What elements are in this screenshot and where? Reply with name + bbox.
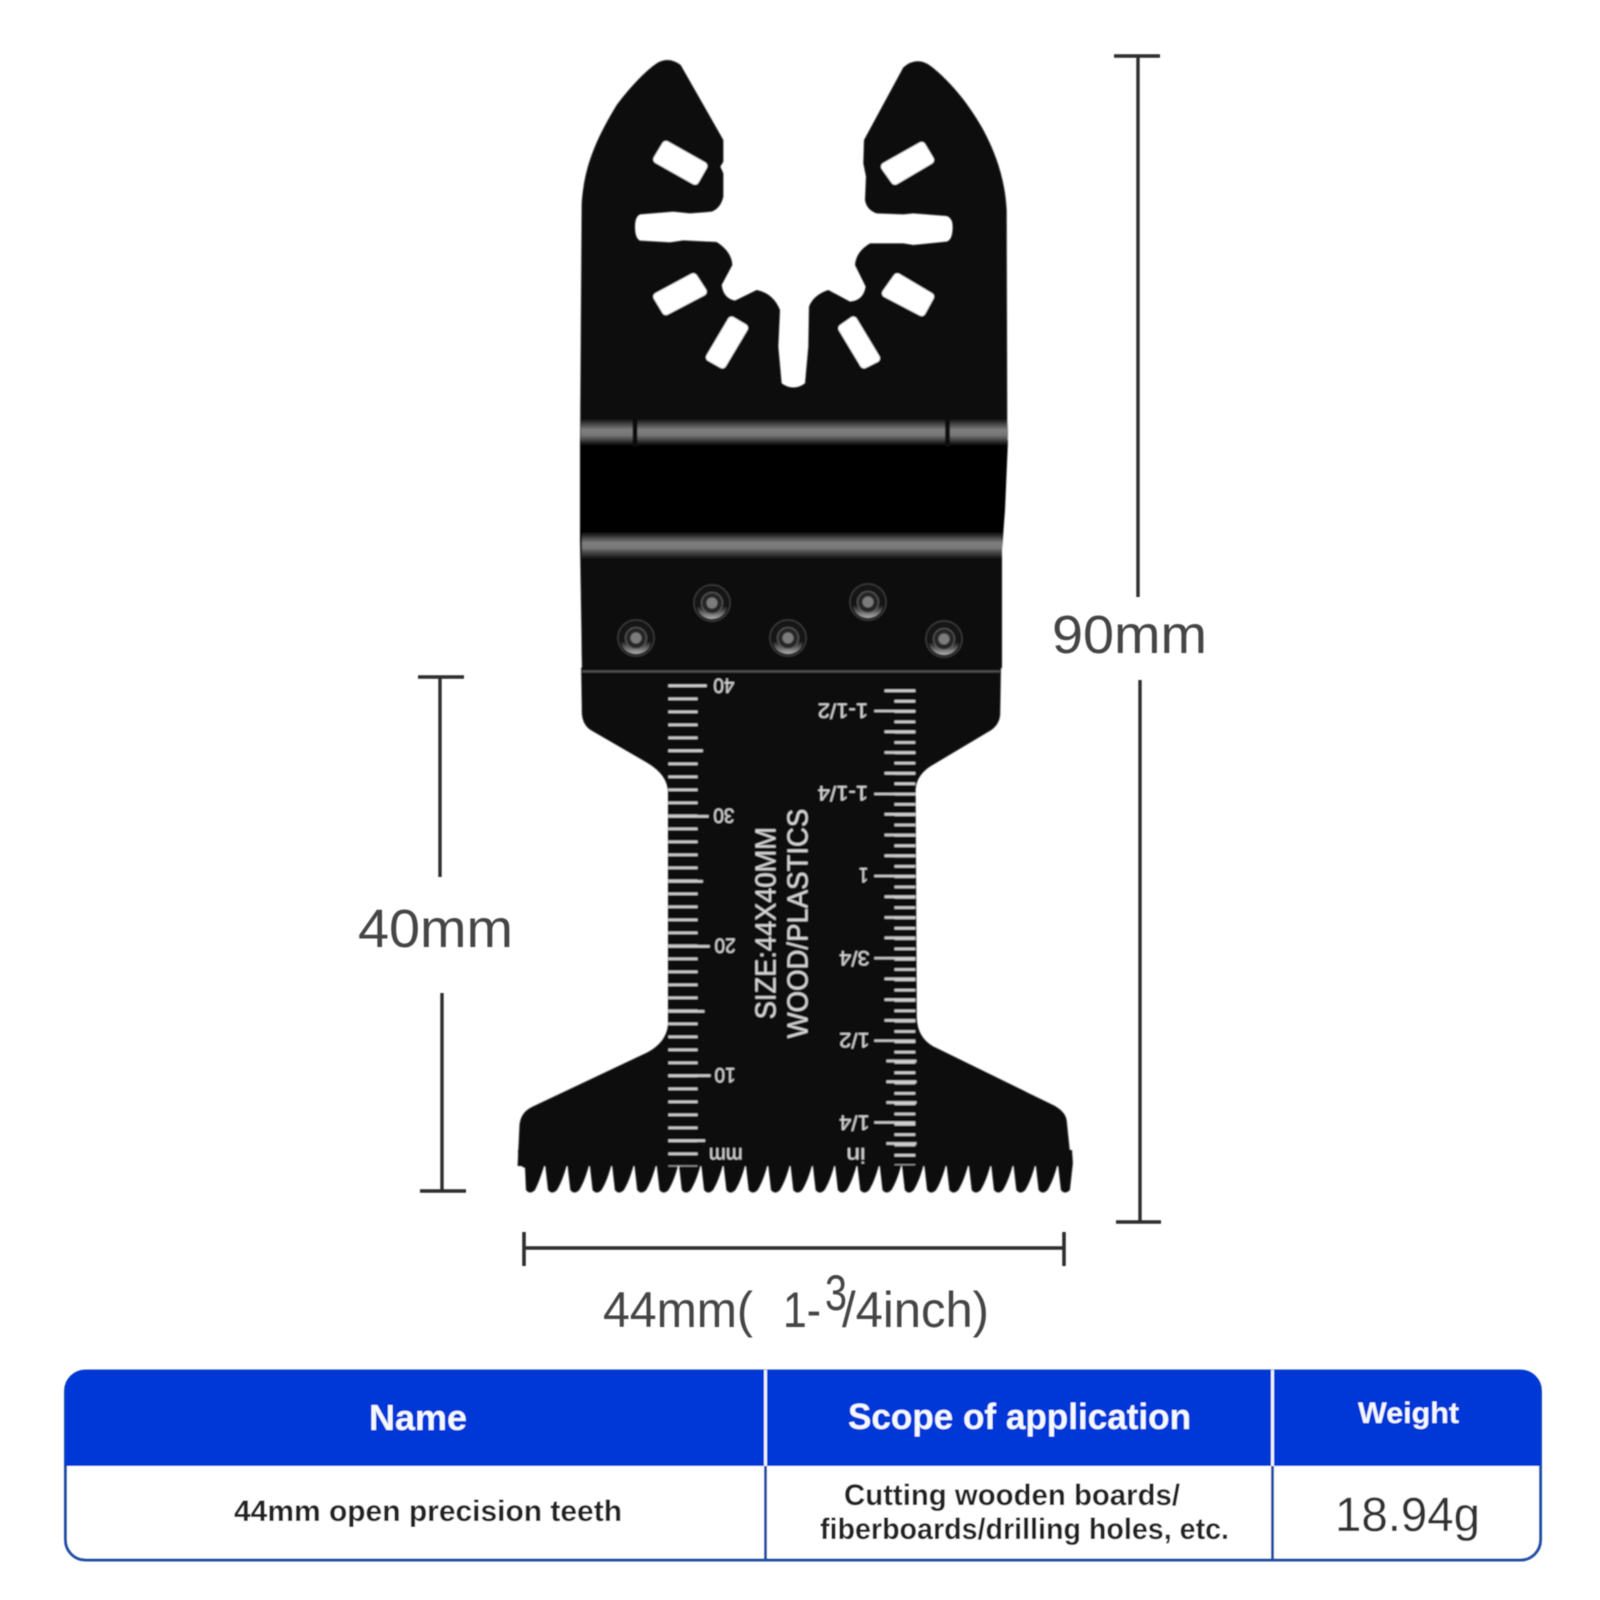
blade mounting head with star cut-out [580,60,1007,453]
label 40: 40 [713,674,734,698]
table body [66,1371,1540,1560]
slot upper right [885,146,930,181]
label 1: 1 [859,863,868,887]
mid section body [580,440,1008,668]
shank outline [518,668,1071,1166]
size engraving: SIZE:44X40MM [750,827,782,1019]
width label: 44mm( [603,1282,753,1338]
dimension: cutting depth 40mm [358,677,513,1191]
slot upper left [657,145,703,181]
cell: weight value: 18.94g [1335,1489,1480,1542]
blade shank and ruler [518,668,1071,1167]
bend slit right [945,417,950,447]
specification table [65,1370,1541,1560]
slot middle left [657,277,703,311]
label in: in [846,1143,865,1167]
column dividers on body [766,1466,1272,1560]
column dividers on header [766,1370,1272,1466]
mounting slots [657,145,930,364]
depth bracket [418,677,466,1191]
label 3/4: 3/4 [839,946,870,970]
blade bent mid section with rivets [580,417,1008,668]
dimension: overall length 90mm [1052,56,1207,1222]
slot lower left [710,321,744,364]
rivets [618,584,962,657]
label 1-1/4: 1-1/4 [818,781,868,805]
header: Scope of application: Scope of application [848,1396,1191,1437]
lower plate tint [581,552,1002,668]
label 30: 30 [713,804,734,828]
label 20: 20 [715,934,736,958]
upper bend highlight [581,419,1008,446]
header: Weight: Weight [1358,1397,1459,1430]
width label [603,1265,989,1338]
length bracket [1114,56,1161,1222]
label mm: mm [709,1143,743,1167]
saw teeth [518,1150,1073,1192]
label 1/4: 1/4 [839,1110,870,1135]
width label: /4inch) [842,1282,989,1338]
blade illustration [518,60,1073,1192]
head outline [580,60,1007,453]
material engraving: WOOD/PLASTICS [781,809,814,1038]
cell: name value: 44mm open precision teeth [234,1495,622,1528]
label 1/2: 1/2 [839,1028,870,1052]
depth label: 40mm [358,899,513,959]
cell: scope value [820,1479,1229,1546]
width bracket [524,1232,1064,1266]
inch ruler ticks [874,690,916,1165]
label 10: 10 [715,1063,736,1087]
slot middle right [886,277,930,312]
cell: scope value: Cutting wooden boards/ [844,1479,1181,1512]
width label: 1- [783,1282,821,1338]
metric ruler ticks [668,685,710,1166]
table header band [65,1370,1541,1466]
length label: 90mm [1052,605,1207,665]
dimension: width 44mm [524,1232,1064,1338]
label 1-1/2: 1-1/2 [818,699,868,723]
bend slit left [632,417,638,447]
cell: scope value: fiberboards/drilling holes, etc. [820,1513,1229,1546]
header: Name: Name [369,1397,467,1438]
width label: 3 [825,1265,847,1321]
seam line [582,669,1000,674]
lower bend highlight [582,532,1002,559]
ruler labels [709,674,870,1167]
slot lower right [842,321,876,364]
